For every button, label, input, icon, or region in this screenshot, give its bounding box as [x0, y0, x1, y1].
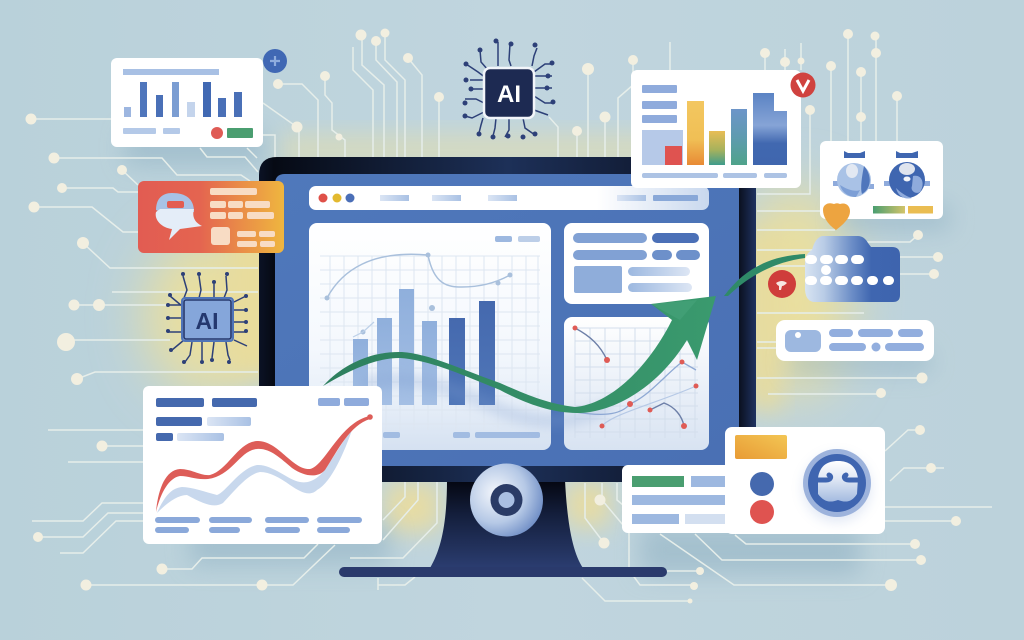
label: AI: AI — [497, 81, 521, 108]
top right panel — [564, 223, 709, 304]
icon: red pin — [768, 270, 796, 298]
ribbon shadow — [360, 380, 610, 421]
icon: plus badge — [263, 49, 287, 73]
chart: area band — [157, 430, 352, 513]
card: top-left bar chart — [111, 49, 287, 147]
bottom right line chart panel — [564, 317, 709, 450]
card: red message card — [138, 181, 284, 253]
card: pill list — [776, 320, 934, 361]
card: bottom list — [622, 465, 742, 533]
monitor screen — [275, 174, 739, 466]
card: top-right bar chart — [631, 70, 816, 188]
browser toolbar — [309, 186, 709, 210]
main chart panel — [309, 223, 551, 450]
chart: red line — [156, 416, 370, 512]
icon: globe right — [884, 151, 930, 199]
monitor — [259, 157, 756, 577]
icon: orange heart — [823, 203, 850, 230]
card: bottom-left line chart — [143, 386, 382, 544]
growth arrow — [323, 254, 805, 413]
card: blue tag — [768, 236, 900, 302]
monitor stand — [430, 480, 583, 568]
card: face badge — [725, 427, 885, 534]
icon: top AI chip — [462, 38, 556, 140]
icon: globe left — [833, 151, 874, 197]
card: globes — [820, 141, 943, 219]
monitor base — [339, 567, 667, 577]
icon: check badge — [790, 72, 816, 98]
icon: speech bubble — [156, 193, 202, 240]
card shadows — [125, 130, 950, 575]
icon: left AI chip — [166, 272, 248, 364]
monitor knob — [470, 464, 543, 536]
monitor bezel — [259, 157, 756, 482]
label: AI: AI — [196, 308, 218, 334]
icon: face medallion — [803, 449, 871, 522]
